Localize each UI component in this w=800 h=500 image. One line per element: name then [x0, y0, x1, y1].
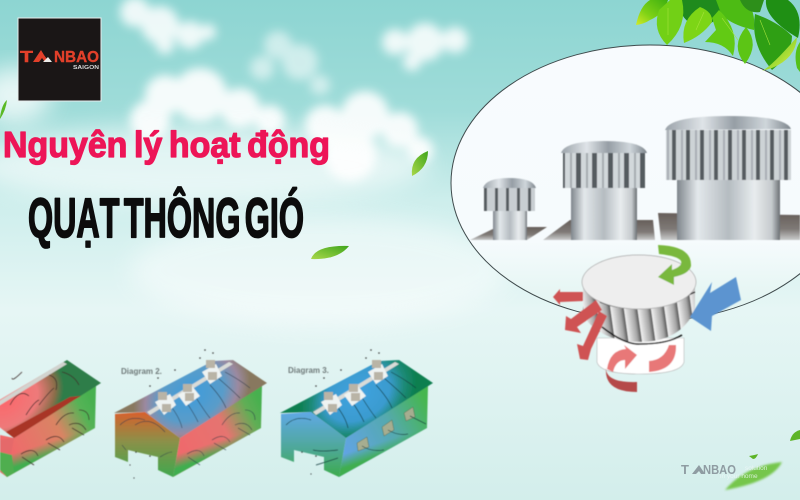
leaf right edge	[790, 430, 800, 441]
arrow: exhaust left	[553, 289, 583, 305]
building 2 roof	[114, 360, 233, 413]
slogan line two: in your home	[720, 473, 758, 480]
fan upper rim	[600, 292, 695, 308]
fan lower rim	[602, 327, 682, 344]
watermark roof icon	[692, 465, 705, 474]
building 3 ridge	[313, 362, 399, 415]
building 3 label: Diagram 3.	[288, 366, 329, 375]
arrow: exhaust bottom left	[577, 311, 607, 360]
watermark wordmark right: NBAO	[703, 462, 736, 477]
fan blades	[583, 285, 695, 342]
arrow: rotation green	[658, 245, 691, 285]
building 3 roof	[280, 360, 399, 413]
leaf centre top	[412, 151, 428, 176]
product: small turbine vent	[470, 178, 547, 240]
watermark slogan	[720, 465, 768, 480]
arrow: exhaust lower left	[565, 300, 602, 333]
building 3 wall windows	[357, 407, 415, 451]
building 3 particles	[301, 349, 380, 475]
fan lower cylinder	[597, 338, 684, 374]
building: diagram 1	[0, 360, 101, 477]
building 2 particles	[129, 349, 214, 479]
arrow: swirl pink left	[607, 345, 637, 372]
arrow: air intake blue	[690, 277, 741, 331]
logo wordmark left: T	[20, 49, 33, 66]
watermark wordmark left: T	[681, 462, 689, 477]
clouds	[0, 0, 510, 325]
logo wordmark right: NBAO	[54, 49, 99, 66]
building 3 vents	[321, 360, 388, 415]
heading: QUẠT THÔNG GIÓ: QUẠT THÔNG GIÓ	[28, 186, 304, 249]
arrow: swirl pink right	[649, 345, 676, 372]
slogan line one: solution	[745, 465, 768, 472]
logo subtitle: SAIGON	[73, 65, 99, 71]
building: diagram 3	[280, 349, 433, 477]
oval panel: product photo	[451, 45, 800, 321]
building 2 ridge	[147, 362, 233, 415]
fan top disc	[582, 255, 696, 309]
small leaf left edge	[0, 100, 7, 119]
building 2 vents	[155, 360, 222, 415]
building 3 air lines	[286, 372, 426, 465]
watermark logo	[681, 462, 736, 477]
arrow: swirl dark red	[606, 368, 637, 392]
leaf blurred bottom right	[725, 462, 782, 490]
building: diagram 2	[114, 349, 267, 479]
leaf centre	[311, 246, 349, 259]
building 2 gable wall	[115, 412, 180, 477]
heading: Nguyên lý hoạt động: Nguyên lý hoạt động	[3, 124, 330, 165]
diagram: fan working principle	[553, 245, 741, 392]
product: large turbine vent	[658, 116, 800, 240]
building 3 side wall	[339, 385, 428, 477]
logo: Tan Bao Saigon	[18, 18, 101, 101]
product: medium turbine vent	[543, 141, 655, 240]
building 2 label: Diagram 2.	[121, 367, 162, 376]
leaf cluster top right	[636, 0, 800, 72]
logo roof icon	[33, 50, 49, 62]
leaf small bottom right	[749, 454, 758, 459]
building 3 gable wall	[281, 412, 346, 477]
building 2 air lines	[120, 372, 255, 465]
building 2 side wall	[173, 385, 262, 477]
